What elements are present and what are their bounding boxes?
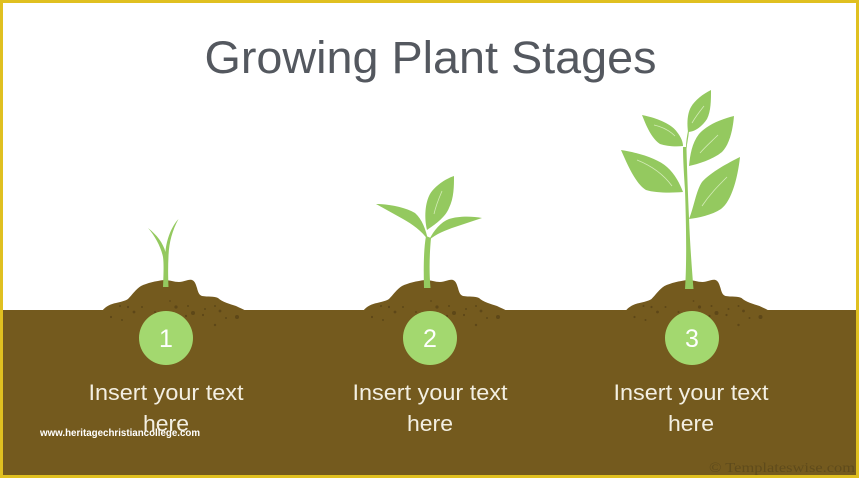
caption 1: here — [143, 411, 189, 436]
number badge 3: 3 — [685, 325, 699, 353]
caption 1: Insert your text — [88, 380, 244, 405]
website watermark: www.heritagechristiancollege.com — [39, 428, 200, 439]
stem — [424, 236, 431, 288]
soil mound 1 — [102, 280, 246, 326]
seedling — [376, 176, 482, 288]
caption 3: here — [668, 411, 714, 436]
plant — [621, 90, 740, 289]
caption 3: Insert your text — [614, 380, 768, 405]
soil mound 2 — [363, 280, 507, 326]
number badge 1 — [139, 311, 193, 365]
caption 2: here — [407, 411, 453, 436]
number badge 1: 1 — [159, 325, 173, 353]
caption 2: Insert your text — [352, 380, 508, 405]
left leaf — [376, 204, 428, 240]
number badge 3 — [665, 311, 719, 365]
title: Growing Plant Stages — [204, 32, 656, 83]
top leaf — [687, 90, 711, 132]
ground — [0, 310, 859, 478]
lower right leaf — [689, 157, 740, 219]
stage 1: sprout and soil mound — [102, 219, 246, 326]
right leaf — [429, 217, 482, 240]
sprout — [148, 219, 178, 287]
lower left leaf — [621, 150, 683, 193]
soil mound 3 — [626, 280, 770, 326]
upper left leaf — [642, 115, 683, 146]
templateswise watermark: © Templateswise.com — [709, 461, 855, 476]
stage 3: grown plant and soil mound — [621, 90, 770, 326]
centre leaf — [425, 176, 454, 230]
upper right leaf — [689, 116, 734, 166]
stage 2: seedling and soil mound — [363, 176, 507, 326]
number badge 2 — [403, 311, 457, 365]
stem — [683, 131, 694, 289]
number badge 2: 2 — [423, 325, 437, 353]
